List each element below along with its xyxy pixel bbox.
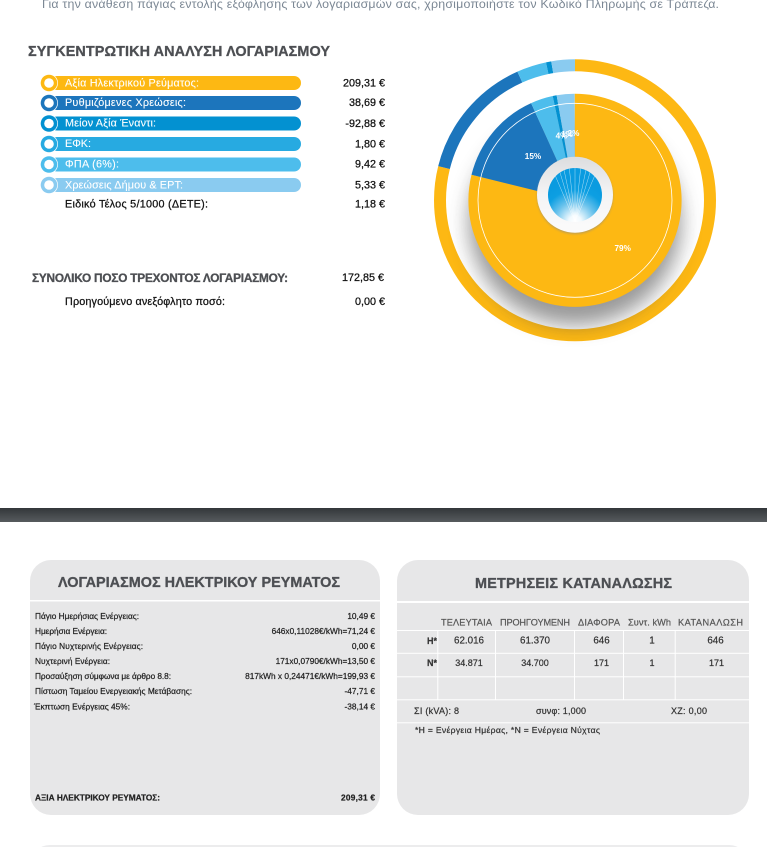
table header: ΔΙΑΦΟΡΑ	[578, 618, 621, 628]
charge lines: Ημερήσια Ενέργεια:	[35, 626, 107, 636]
charge lines: -47,71 €	[345, 686, 375, 696]
row: special fee	[65, 199, 385, 211]
row: municipal charges	[40, 176, 385, 194]
row: regulated charges: 38,69 €	[349, 97, 385, 109]
day row: 1	[649, 636, 655, 646]
pie percentages: 4%	[556, 132, 568, 140]
charge lines: 10,49 €	[347, 611, 375, 621]
charge lines: Νυχτερινή Ενέργεια:	[35, 656, 110, 666]
heading: account summary: ΣΥΓΚΕΝΤΡΩΤΙΚΗ ΑΝΑΛΥΣΗ ΛΟΓΑΡΙΑΣΜΟΥ	[28, 44, 330, 60]
pie shadow	[469, 119, 681, 325]
charge lines: 0,00 €	[352, 641, 375, 651]
previous unpaid amount	[65, 296, 385, 308]
row: electricity value: Αξία Ηλεκτρικού Ρεύματος:	[65, 78, 199, 90]
panel total	[35, 792, 375, 802]
table header: ΚΑΤΑΝΑΛΩΣΗ	[678, 618, 743, 628]
icon: company logo	[537, 157, 613, 234]
previous unpaid amount: 0,00 €	[355, 296, 385, 308]
charge lines: Προσαύξηση σύμφωνα με άρθρο 8.8:	[35, 671, 171, 681]
night row: 34.700	[521, 658, 549, 668]
day row: 646	[593, 636, 610, 646]
panel: electricity bill	[30, 560, 380, 815]
row: regulated charges	[40, 94, 385, 112]
row: VAT: 9,42 €	[355, 159, 385, 171]
row: special fee: Ειδικό Τέλος 5/1000 (ΔΕΤΕ):	[65, 199, 208, 211]
pie percentages: 79%	[615, 244, 632, 253]
night row: 171	[594, 658, 609, 668]
pie slices	[522, 147, 628, 254]
row: electricity value	[40, 74, 385, 92]
row: regulated charges: Ρυθμιζόμενες Χρεώσεις:	[65, 97, 186, 109]
charge lines: Πάγιο Ημερήσιας Ενέργειας:	[35, 611, 139, 621]
charge lines: -38,14 €	[345, 702, 375, 712]
charge lines: 646x0,11028€/kWh=71,24 €	[272, 626, 375, 636]
row: credit	[40, 114, 385, 132]
day row: Η*	[427, 636, 437, 646]
row: credit: -92,88 €	[345, 118, 385, 130]
charge lines: Πίστωση Ταμείου Ενεργειακής Μετάβασης:	[35, 686, 192, 696]
pie percentages: 2%	[568, 129, 580, 138]
charge lines: 817kWh x 0,24471€/kWh=199,93 €	[245, 671, 375, 681]
row: municipal charges: Χρεώσεις Δήμου & ΕΡΤ:	[65, 180, 183, 192]
panel total: ΑΞΙΑ ΗΛΕΚΤΡΙΚΟΥ ΡΕΥΜΑΤΟΣ:	[35, 792, 160, 802]
charge lines: Έκπτωση Ενέργειας 45%:	[33, 702, 130, 712]
current bill total: ΣΥΝΟΛΙΚΟ ΠΟΣΟ ΤΡΕΧΟΝΤΟΣ ΛΟΓΑΡΙΑΣΜΟΥ:	[32, 271, 288, 285]
pie percentages: 1%	[561, 130, 574, 139]
pie percentages: 15%	[525, 152, 542, 161]
previous unpaid amount: Προηγούμενο ανεξόφλητο ποσό:	[65, 296, 225, 308]
table header	[441, 618, 743, 628]
row: excise tax: 1,80 €	[355, 139, 385, 151]
row: municipal charges: 5,33 €	[355, 180, 385, 192]
day row	[427, 636, 724, 646]
panel heading: ΛΟΓΑΡΙΑΣΜΟΣ ΗΛΕΚΤΡΙΚΟΥ ΡΕΥΜΑΤΟΣ	[58, 575, 340, 591]
row: excise tax: ΕΦΚ:	[65, 138, 91, 150]
panel: consumption measurements	[397, 560, 749, 815]
row: VAT	[40, 156, 385, 174]
footnote: *Η = Ενέργεια Ημέρας, *Ν = Ενέργεια Νύχτας	[415, 725, 600, 735]
night row: Ν*	[427, 658, 437, 668]
power factors: ΧΖ: 0,00	[671, 706, 707, 716]
power factors: συνφ: 1,000	[536, 706, 586, 716]
row: special fee: 1,18 €	[355, 199, 385, 211]
panel heading: ΜΕΤΡΗΣΕΙΣ ΚΑΤΑΝΑΛΩΣΗΣ	[475, 576, 672, 592]
power factors	[414, 706, 707, 716]
legend and amounts	[40, 74, 385, 211]
donut and pie chart	[440, 65, 710, 335]
panel: next section top edge	[30, 845, 749, 847]
dark separator bar	[0, 508, 767, 522]
measurements table	[397, 618, 749, 723]
night row	[427, 658, 724, 668]
outer ring	[440, 65, 710, 335]
day row: 646	[707, 636, 724, 646]
current bill total: 172,85 €	[342, 272, 384, 284]
night row: 1	[649, 658, 655, 668]
charge lines: Πάγιο Νυχτερινής Ενέργειας:	[35, 641, 143, 651]
day row: 61.370	[520, 636, 551, 646]
row: credit: Μείον Αξία Έναντι:	[65, 118, 156, 130]
row: electricity value: 209,31 €	[343, 78, 385, 90]
pie percentages	[525, 129, 632, 253]
day row: 62.016	[454, 636, 485, 646]
charge lines	[33, 611, 375, 712]
row: excise tax	[40, 135, 385, 153]
power factors: ΣΙ (kVA): 8	[414, 706, 459, 716]
table header: ΤΕΛΕΥΤΑΙΑ	[441, 618, 493, 628]
table header: ΠΡΟΗΓΟΥΜΕΝΗ	[500, 618, 570, 628]
night row: 34.871	[455, 658, 483, 668]
charge lines: 171x0,0790€/kWh=13,50 €	[276, 656, 375, 666]
row: VAT: ΦΠΑ (6%):	[65, 158, 119, 170]
table header: Συντ. kWh	[628, 618, 671, 628]
night row: 171	[709, 658, 724, 668]
panel total: 209,31 €	[341, 792, 375, 802]
